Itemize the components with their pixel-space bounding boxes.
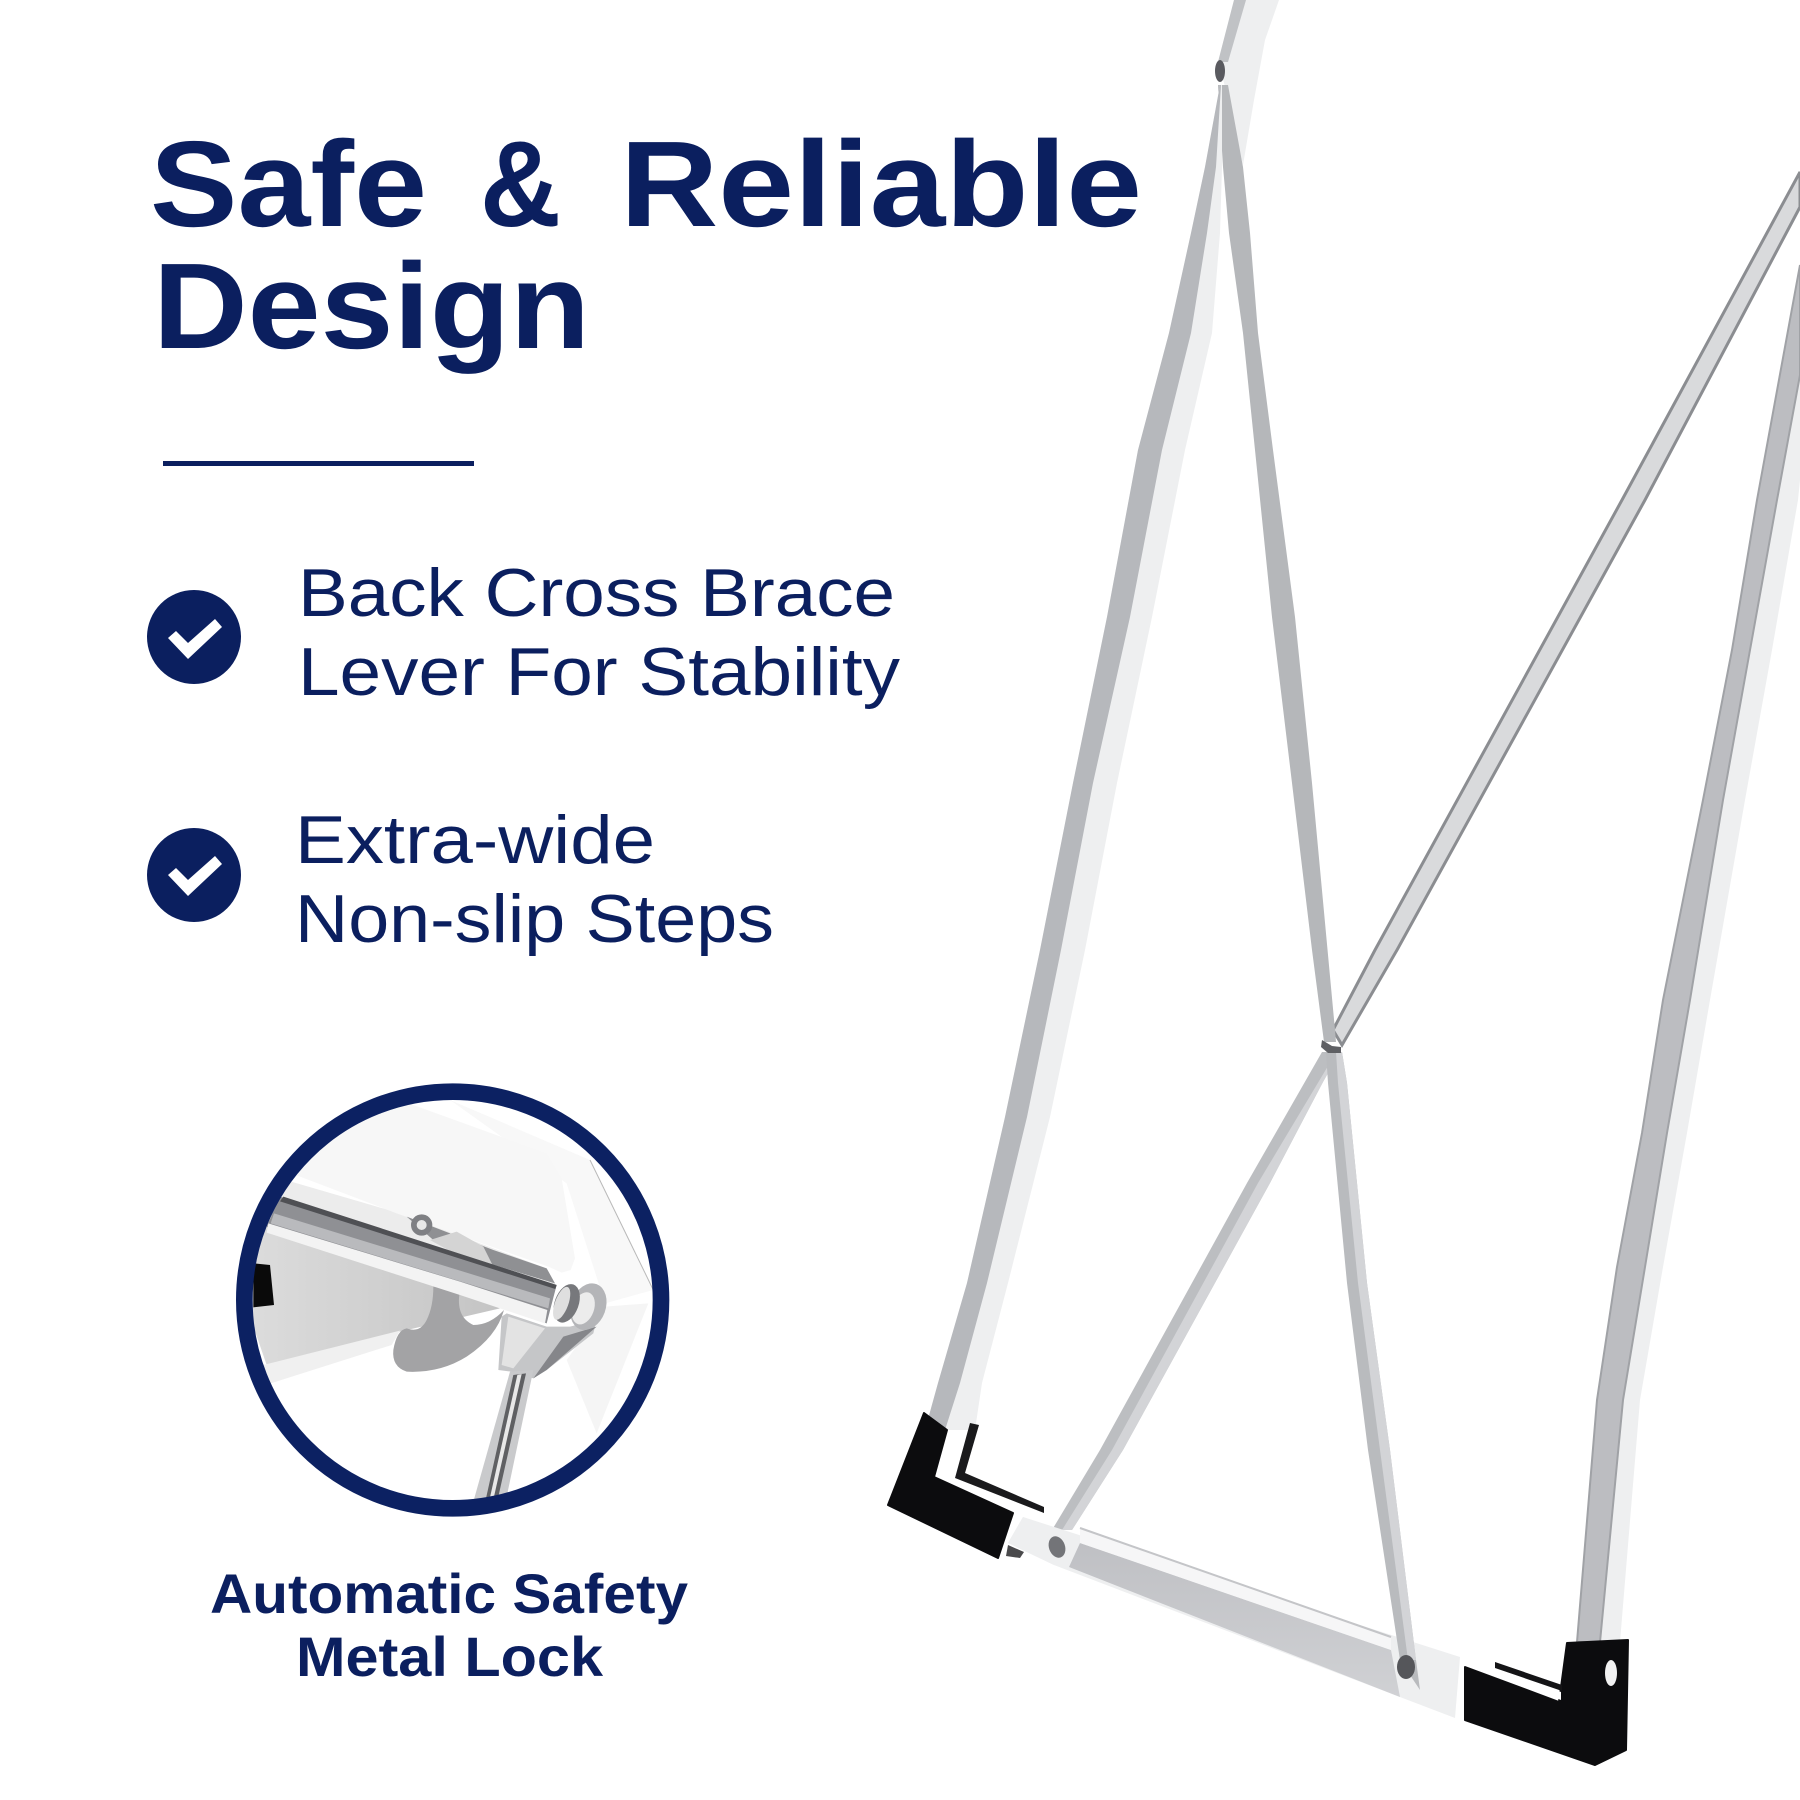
title: [150, 116, 1142, 374]
feature: back cross brace: Lever For Stability: [298, 634, 900, 710]
title: Design: [153, 238, 590, 374]
inset caption: [210, 1562, 688, 1688]
title: Safe: [150, 116, 427, 252]
feature: extra-wide steps: [147, 802, 774, 957]
feature: back cross brace: Back Cross Brace: [298, 555, 895, 631]
left foot: [888, 1413, 1068, 1566]
rear brace: [1218, 85, 1420, 1690]
product: folding frame: [888, 0, 1800, 1765]
inset ring: [244, 1092, 661, 1508]
feature: extra-wide steps: Non-slip Steps: [295, 881, 774, 957]
detail inset: safety lock: [233, 1083, 673, 1523]
title: Reliable: [620, 116, 1142, 252]
inset caption: Automatic Safety: [210, 1562, 688, 1625]
left rail: [925, 85, 1222, 1430]
upper bar: [1218, 0, 1279, 165]
title: &: [480, 116, 561, 252]
feature: back cross brace: [147, 555, 900, 710]
feature: extra-wide steps: Extra-wide: [295, 802, 655, 878]
right foot: [1465, 1640, 1628, 1765]
long diagonal brace: [1052, 172, 1800, 1530]
inset caption: Metal Lock: [296, 1625, 604, 1688]
center pivot: [1321, 1040, 1341, 1053]
bottom bar: [1008, 1517, 1460, 1718]
left pivot: [1215, 60, 1225, 82]
right rail: [1577, 265, 1800, 1642]
